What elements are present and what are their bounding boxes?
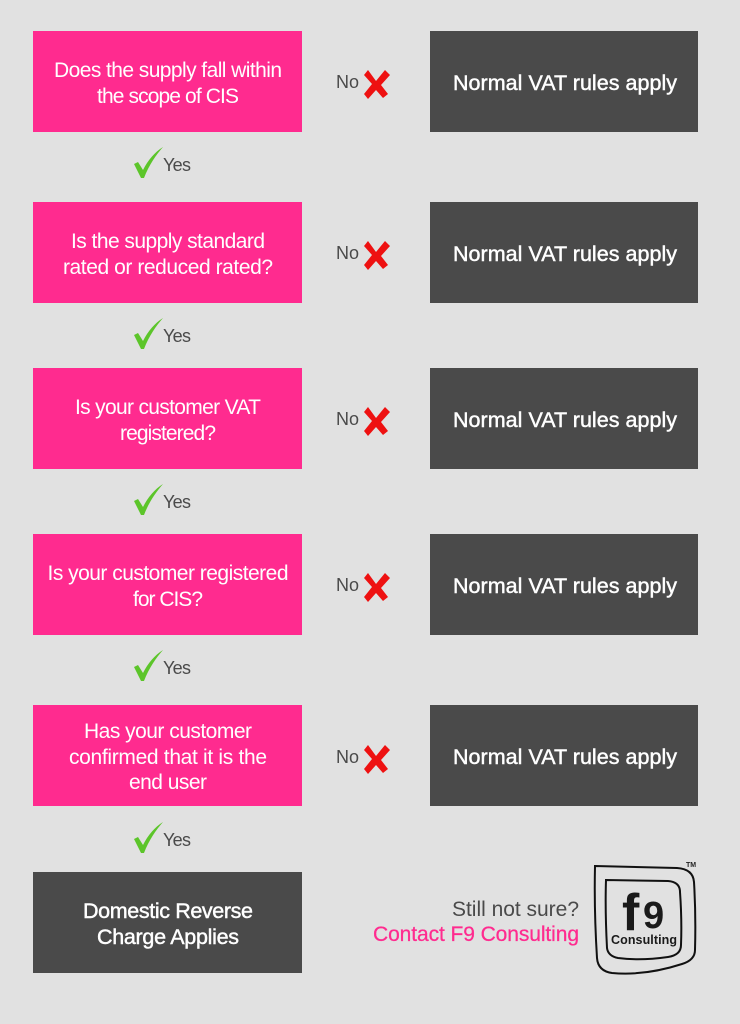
step 1: question: the scope of CIS — [97, 85, 239, 108]
step 5: question — [33, 705, 302, 806]
step 3: outcome: Normal VAT rules apply — [453, 408, 677, 432]
step 4: outcome: Normal VAT rules apply — [453, 574, 677, 598]
step 3: yes label and tick: Yes — [163, 492, 191, 512]
step 2: question — [33, 202, 302, 303]
step 2: question: Is the supply standard — [71, 230, 265, 253]
step 1: outcome — [430, 31, 698, 132]
contact call to action — [373, 898, 579, 946]
step 5: question: Has your customer — [84, 720, 252, 743]
logo: F9 Consulting — [595, 862, 696, 974]
step 3: no label and cross — [336, 407, 390, 436]
step 1: no label and cross: No — [336, 72, 359, 92]
step 4: yes label and tick: Yes — [163, 658, 191, 678]
step 2: question: rated or reduced rated? — [63, 256, 273, 279]
step 2: no label and cross: No — [336, 243, 359, 263]
step 5: no label and cross: No — [336, 747, 359, 767]
step 2: yes label and tick — [134, 318, 191, 349]
step 2: no label and cross — [336, 241, 390, 270]
step 3: no label and cross: No — [336, 409, 359, 429]
step 3: question — [33, 368, 302, 469]
step 1: outcome: Normal VAT rules apply — [453, 71, 677, 95]
final result: domestic reverse charge: Charge Applies — [97, 925, 239, 949]
contact call to action: Contact F9 Consulting — [373, 923, 579, 946]
step 4: outcome — [430, 534, 698, 635]
logo: F9 Consulting: TM — [686, 862, 696, 869]
logo: F9 Consulting: f — [622, 884, 640, 942]
step 2: yes label and tick: Yes — [163, 326, 191, 346]
step 5: question: confirmed that it is the — [69, 746, 267, 769]
step 5: question: end user — [129, 771, 207, 794]
step 1: yes label and tick: Yes — [163, 155, 191, 175]
step 1: question — [33, 31, 302, 132]
step 4: no label and cross: No — [336, 575, 359, 595]
step 2: outcome: Normal VAT rules apply — [453, 242, 677, 266]
step 5: yes label and tick — [134, 822, 191, 853]
step 4: question — [33, 534, 302, 635]
step 4: no label and cross — [336, 573, 390, 602]
step 4: question: for CIS? — [133, 588, 203, 611]
step 3: yes label and tick — [134, 484, 191, 515]
step 3: question: registered? — [120, 422, 216, 445]
final result: domestic reverse charge — [33, 872, 302, 973]
logo: F9 Consulting: 9 — [643, 895, 664, 937]
step 1: yes label and tick — [134, 147, 191, 178]
step 2: outcome — [430, 202, 698, 303]
step 5: outcome — [430, 705, 698, 806]
step 5: yes label and tick: Yes — [163, 830, 191, 850]
step 3: question: Is your customer VAT — [75, 396, 261, 419]
step 4: yes label and tick — [134, 650, 191, 681]
final result: domestic reverse charge: Domestic Reverse — [83, 899, 253, 923]
step 1: no label and cross — [336, 70, 390, 99]
step 5: outcome: Normal VAT rules apply — [453, 745, 677, 769]
step 1: question: Does the supply fall within — [54, 59, 282, 82]
step 3: outcome — [430, 368, 698, 469]
logo: F9 Consulting: Consulting — [611, 933, 677, 947]
contact call to action: Still not sure? — [452, 898, 579, 921]
step 5: no label and cross — [336, 745, 390, 774]
step 4: question: Is your customer registered — [48, 562, 288, 585]
